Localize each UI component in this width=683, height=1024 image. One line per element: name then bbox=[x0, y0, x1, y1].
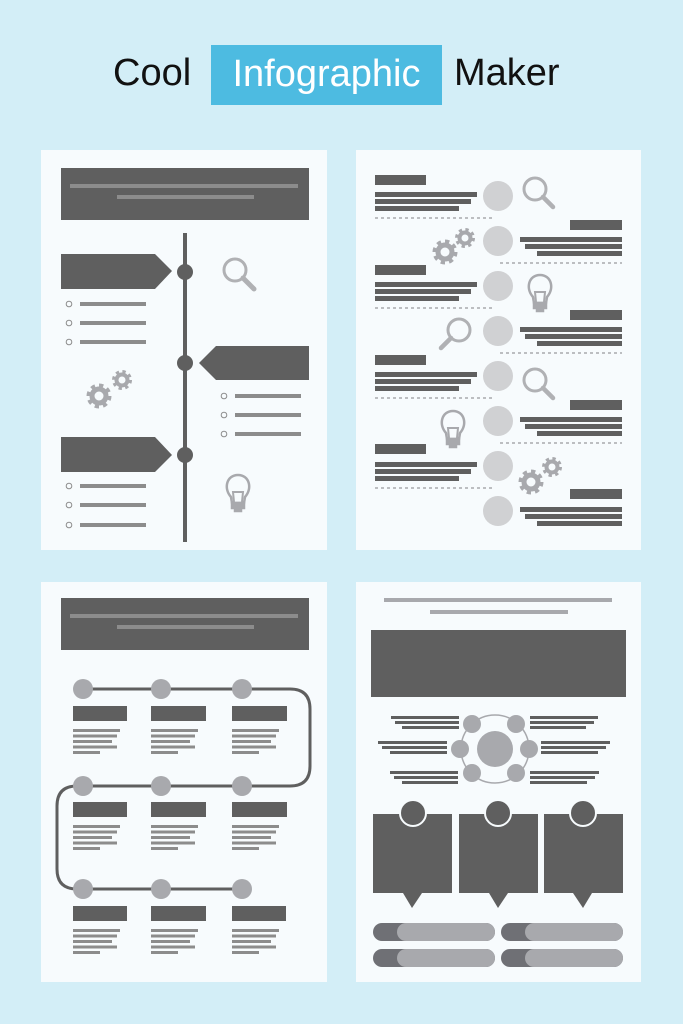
right text blocks bbox=[520, 220, 622, 526]
icon: magnifier mirrored bbox=[441, 319, 470, 348]
panel: snake process bbox=[41, 582, 327, 982]
tag 1 bbox=[61, 254, 172, 289]
title word: Cool: Cool bbox=[113, 52, 191, 94]
icon: light bulb bbox=[227, 475, 249, 511]
panel: vertical timeline bbox=[41, 150, 327, 550]
title highlight: Infographic: Infographic bbox=[232, 53, 420, 95]
header bar bbox=[61, 598, 309, 650]
header bar bbox=[61, 168, 309, 220]
header lines bbox=[384, 598, 612, 614]
icon: magnifier bbox=[524, 178, 553, 207]
big banner bbox=[371, 630, 626, 697]
icon: gears bbox=[434, 230, 474, 262]
panel: zigzag list bbox=[356, 150, 641, 550]
progress pills bbox=[373, 923, 623, 967]
circles column bbox=[483, 181, 513, 526]
step circles bbox=[73, 679, 252, 899]
tag 3 bbox=[61, 437, 172, 472]
tag 2 bbox=[199, 346, 309, 380]
step labels bbox=[73, 706, 287, 921]
bullet list 3 bbox=[66, 483, 146, 528]
icon: magnifier bbox=[224, 259, 254, 289]
callout boxes bbox=[373, 800, 623, 908]
icon: gears bbox=[88, 372, 130, 406]
left text blocks bbox=[375, 175, 477, 481]
title word: Maker: Maker bbox=[454, 52, 560, 94]
bullet list 2 bbox=[221, 393, 301, 437]
snake path bbox=[57, 689, 310, 889]
title bbox=[113, 45, 560, 105]
bullet list 1 bbox=[66, 301, 146, 345]
icon: light bulb bbox=[529, 275, 551, 311]
panel: hub and boxes bbox=[356, 582, 641, 982]
step text lines bbox=[73, 729, 279, 954]
icon: magnifier bbox=[524, 369, 553, 398]
hub diagram bbox=[378, 715, 610, 784]
title highlight: Infographic bbox=[211, 45, 442, 105]
icon: light bulb bbox=[442, 411, 464, 447]
timeline axis bbox=[177, 233, 193, 542]
icon: gears bbox=[520, 458, 560, 492]
